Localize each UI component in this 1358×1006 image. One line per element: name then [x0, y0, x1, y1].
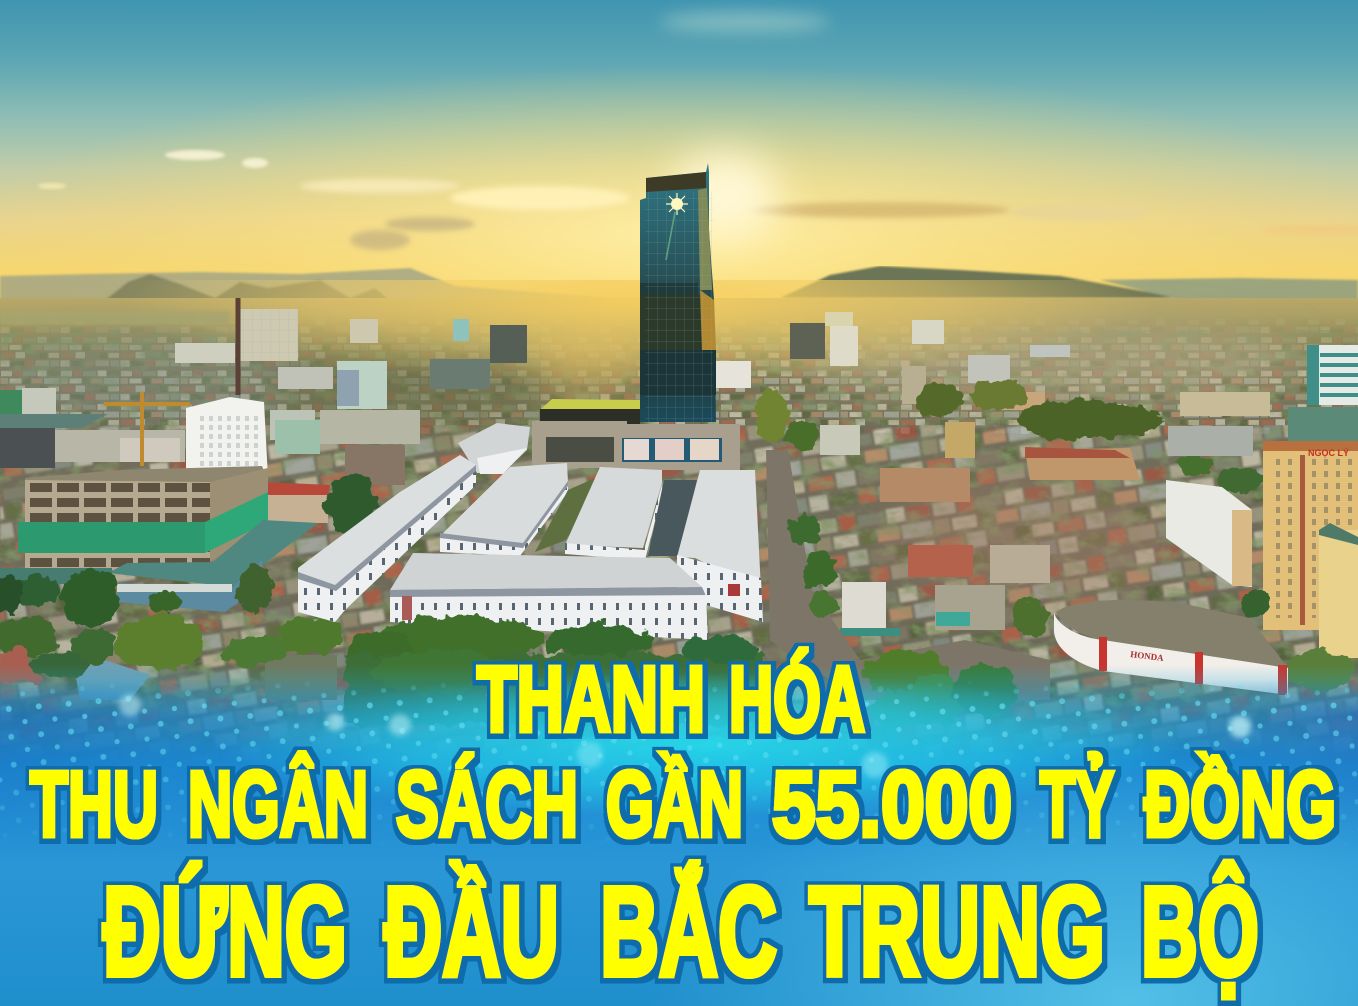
right buildings: [715, 312, 1358, 732]
block 2: [440, 463, 568, 545]
dot matrix: [0, 682, 1358, 832]
far fields: [0, 311, 230, 325]
lens flares: [119, 694, 1251, 778]
title line 3: ĐỨNG: [103, 861, 347, 1002]
title line 2: SÁCH: [396, 752, 578, 856]
title line 2: THU: [30, 752, 158, 856]
street trees: [788, 514, 1354, 690]
title line 2: [30, 752, 1336, 856]
central foreground trees: [345, 616, 765, 725]
title line 3: BẮC: [600, 861, 777, 1002]
green-glass tower: [1307, 345, 1358, 405]
clouds: [38, 12, 1358, 250]
lower light glow: [640, 755, 1358, 1006]
horizon haze: [0, 280, 1358, 390]
darker blue edges: [0, 684, 1358, 816]
title line 1: HÓA: [729, 647, 865, 751]
title line 3: ĐẦU: [384, 861, 559, 1002]
mast: [236, 298, 240, 395]
central glass tower: [640, 163, 716, 422]
sun glow: [0, 0, 1358, 305]
courtyard: [648, 480, 697, 556]
colour regions of the town: [0, 320, 1310, 600]
tree canopy texture: [0, 330, 1358, 750]
left buildings: [0, 298, 527, 700]
title line 2: GẦN: [606, 752, 743, 856]
title line 2: TỶ: [1040, 752, 1114, 856]
block 4: [677, 470, 761, 590]
distant mountains: [0, 266, 1358, 308]
Ngoc Ly hotel: NGỌC LÝ: [1308, 447, 1349, 458]
Ngoc Ly hotel: [1263, 441, 1358, 630]
distant rooftops: [0, 327, 1358, 434]
title line 3: [103, 861, 1259, 1002]
foreground trees: [863, 650, 1017, 732]
sky: [0, 0, 1358, 305]
low hall: [108, 520, 318, 612]
corner building: [1319, 523, 1358, 658]
near rooftops: [0, 425, 1358, 760]
title line 2: 55.000: [772, 752, 1012, 856]
title line 2: NGÂN: [188, 752, 368, 856]
Honda showroom: [1054, 600, 1288, 695]
title line 1: THANH: [477, 647, 705, 751]
white building: [1166, 480, 1252, 587]
banner gradient: [0, 665, 1358, 1006]
ground base: [0, 298, 1358, 760]
garden strip: [535, 475, 602, 552]
title line 3: TRUNG: [809, 861, 1105, 1002]
crane: [104, 392, 190, 466]
white row-house blocks: [298, 423, 763, 640]
title line 3: BỘ: [1141, 861, 1259, 1002]
sun star on glass: [666, 193, 688, 260]
tree band: [756, 379, 1264, 492]
blue title banner: [0, 665, 1358, 1006]
block north-west: [458, 423, 530, 473]
shopping podium: [532, 399, 740, 470]
white hotel: [186, 397, 268, 478]
left trees: [0, 475, 378, 682]
road: [766, 450, 1050, 700]
front block: [390, 553, 702, 590]
LED screens: [624, 439, 649, 460]
title: [30, 647, 1336, 1002]
block 3: [565, 467, 662, 548]
cyan glow: [200, 670, 1200, 830]
Honda sign: HONDA: [1130, 649, 1165, 663]
long block west: [298, 455, 476, 590]
construction block: [18, 466, 268, 570]
